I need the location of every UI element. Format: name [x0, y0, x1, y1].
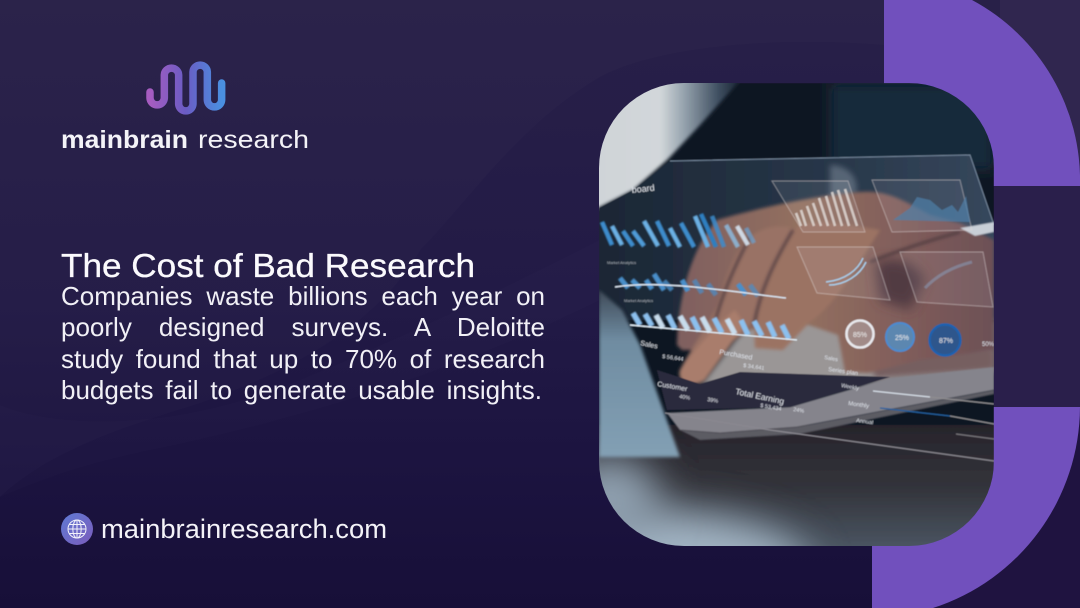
logo wordmark: mainbrain: [61, 126, 188, 154]
donut: dark blue: 87%: [939, 338, 953, 345]
photo: hand on laptop with dashboard overlay: [599, 83, 994, 546]
heading: The Cost of Bad Research: [61, 247, 475, 284]
website url: mainbrainresearch.com: [101, 514, 387, 544]
dashboard labels: 40%: [679, 394, 691, 402]
grey surface between fingers: [700, 320, 994, 385]
jacket: [830, 83, 994, 170]
donut: white: [846, 320, 874, 348]
dashboard labels: 50%: [982, 342, 995, 348]
finger creases: [715, 230, 960, 325]
donut: dark blue: [930, 324, 960, 356]
decorative shape: top right purple arc: [884, 0, 1080, 186]
dashboard labels: Sales: [640, 340, 659, 351]
laptop keyboard: [657, 370, 890, 410]
dashboard labels: $ 53,434: [760, 403, 782, 413]
bar chart row 2: [620, 274, 758, 296]
floating chart frames: [772, 180, 993, 307]
body text: Companies waste billions each year on: [61, 281, 545, 311]
floating area chart: [893, 196, 970, 222]
dashboard labels: 24%: [793, 407, 805, 415]
dashboard labels: Customer: [657, 381, 688, 393]
dashboard labels: board: [631, 183, 655, 195]
floating white bars: [796, 189, 857, 226]
dashboard labels: Total Earning: [735, 386, 785, 406]
donut: blue: 25%: [895, 335, 909, 342]
chart trend line: [615, 285, 786, 298]
logo wordmark: [61, 126, 309, 154]
floating curve chart: [826, 258, 866, 285]
window light: [599, 83, 740, 211]
dashboard labels: Sales: [824, 355, 838, 363]
hand: [677, 192, 994, 385]
logo wordmark: research: [198, 126, 309, 154]
logo icon: [150, 65, 222, 111]
dashboard panel: [599, 155, 994, 320]
bar chart row 3: [633, 313, 789, 339]
photo backdrop: [599, 83, 994, 426]
body text: [61, 281, 545, 405]
dashboard labels: Market Analytics: [624, 298, 653, 303]
dashboard labels: Series plan: [828, 367, 858, 377]
laptop silver deck: [667, 367, 994, 433]
body text: study found that up to 70% of research: [61, 344, 545, 374]
website icon: globe: [61, 513, 93, 545]
progress lines: [665, 391, 994, 461]
dashboard labels: 39%: [707, 397, 719, 405]
decorative shape: bottom right purple arc: [872, 407, 1080, 608]
donut: blue: [886, 323, 914, 351]
body text: budgets fail to generate usable insights.: [61, 375, 542, 405]
dashboard labels: [607, 183, 995, 426]
dashboard labels: Weekly: [841, 383, 860, 392]
dashboard labels: Purchased: [719, 349, 753, 362]
dashboard labels: Annual: [856, 418, 874, 426]
dashboard labels: $ 34,641: [743, 363, 765, 372]
bar chart row 1: [602, 214, 754, 247]
dashboard labels: Monthly: [848, 401, 869, 410]
table surface: [599, 425, 994, 550]
dashboard labels: $ 56,644: [662, 354, 684, 363]
dashboard labels: Market Analytics: [607, 260, 636, 265]
donut: white: 85%: [853, 332, 867, 339]
body text: poorly designed surveys. A Deloitte: [61, 312, 545, 342]
left blurred screen edge: [599, 290, 680, 457]
